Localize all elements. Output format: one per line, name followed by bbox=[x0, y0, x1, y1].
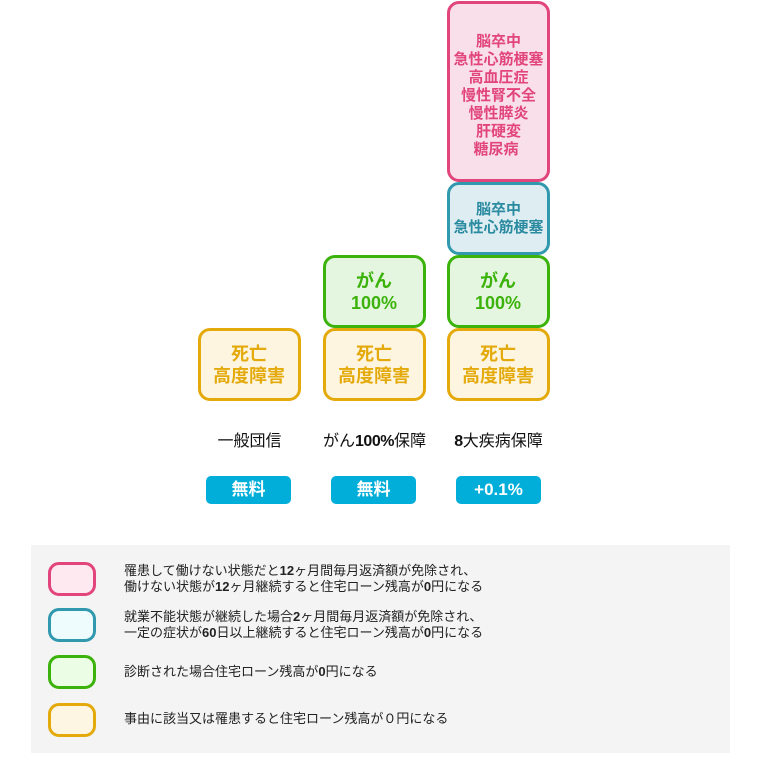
legend swatch: green bbox=[48, 655, 96, 689]
box: death and severe disability: 死亡 bbox=[356, 344, 392, 364]
box: cancer 100% bbox=[447, 255, 550, 328]
box: seven chronic and acute diseases: 糖尿病 bbox=[473, 141, 518, 158]
price badge: plus 0.1%: +0.1% bbox=[474, 480, 523, 499]
price badge: free: 無料 bbox=[356, 480, 390, 499]
box: seven chronic and acute diseases: 脳卒中 bbox=[476, 33, 521, 50]
box: stroke and acute myocardial infarction bbox=[447, 182, 550, 255]
legend text: pink bbox=[124, 563, 483, 594]
box: cancer 100%: 100% bbox=[351, 293, 397, 313]
legend text: yellow: 事由に該当又は罹患すると住宅ローン残高が０円になる bbox=[124, 711, 448, 726]
label: general group credit life: 一般団信 bbox=[217, 433, 282, 450]
legend text: green: 診断された場合住宅ローン残高が0円になる bbox=[124, 664, 378, 679]
box: seven chronic and acute diseases: 慢性膵炎 bbox=[468, 105, 528, 122]
box: cancer 100% bbox=[323, 255, 426, 328]
box: death and severe disability: 死亡 bbox=[231, 344, 267, 364]
panel: legend bbox=[31, 545, 730, 753]
box: stroke and acute myocardial infarction: 急性心筋梗塞 bbox=[453, 219, 544, 236]
box: death and severe disability bbox=[198, 328, 301, 401]
legend text: teal bbox=[124, 609, 483, 640]
box: death and severe disability: 死亡 bbox=[480, 344, 516, 364]
box: cancer 100%: がん bbox=[480, 271, 516, 291]
legend swatch: teal bbox=[48, 608, 96, 642]
box: death and severe disability bbox=[447, 328, 550, 401]
box: seven chronic and acute diseases: 急性心筋梗塞 bbox=[453, 51, 544, 68]
label: eight major diseases coverage: 8大疾病保障 bbox=[454, 433, 543, 450]
box: seven chronic and acute diseases: 慢性腎不全 bbox=[461, 87, 536, 104]
label: cancer 100% coverage: がん100%保障 bbox=[323, 433, 426, 450]
box: seven chronic and acute diseases bbox=[447, 1, 550, 182]
box: death and severe disability: 高度障害 bbox=[213, 366, 285, 386]
box: death and severe disability: 高度障害 bbox=[462, 366, 534, 386]
price badge: plus 0.1% bbox=[456, 476, 541, 504]
stack: general group credit life bbox=[198, 328, 301, 401]
legend text: teal: 一定の症状が60日以上継続すると住宅ローン残高が0円になる bbox=[124, 624, 483, 640]
legend text: pink: 働けない状態が12ヶ月継続すると住宅ローン残高が0円になる bbox=[124, 579, 483, 594]
price badge: free bbox=[331, 476, 416, 504]
legend text: pink: 罹患して働けない状態だと12ヶ月間毎月返済額が免除され、 bbox=[124, 563, 476, 578]
price badge: free: 無料 bbox=[232, 480, 266, 499]
box: death and severe disability bbox=[323, 328, 426, 401]
stack: eight major diseases coverage bbox=[447, 1, 550, 401]
stack: cancer 100% coverage bbox=[323, 255, 426, 401]
legend swatch: yellow bbox=[48, 703, 96, 737]
box: death and severe disability: 高度障害 bbox=[338, 366, 410, 386]
legend text: teal: 就業不能状態が継続した場合2ヶ月間毎月返済額が免除され、 bbox=[124, 609, 482, 624]
box: cancer 100%: がん bbox=[356, 271, 392, 291]
box: seven chronic and acute diseases: 肝硬変 bbox=[476, 123, 521, 140]
box: seven chronic and acute diseases: 高血圧症 bbox=[468, 69, 528, 86]
box: stroke and acute myocardial infarction: 脳卒中 bbox=[476, 201, 521, 218]
legend swatch: pink bbox=[48, 562, 96, 596]
box: cancer 100%: 100% bbox=[475, 293, 521, 313]
price badge: free bbox=[206, 476, 291, 504]
